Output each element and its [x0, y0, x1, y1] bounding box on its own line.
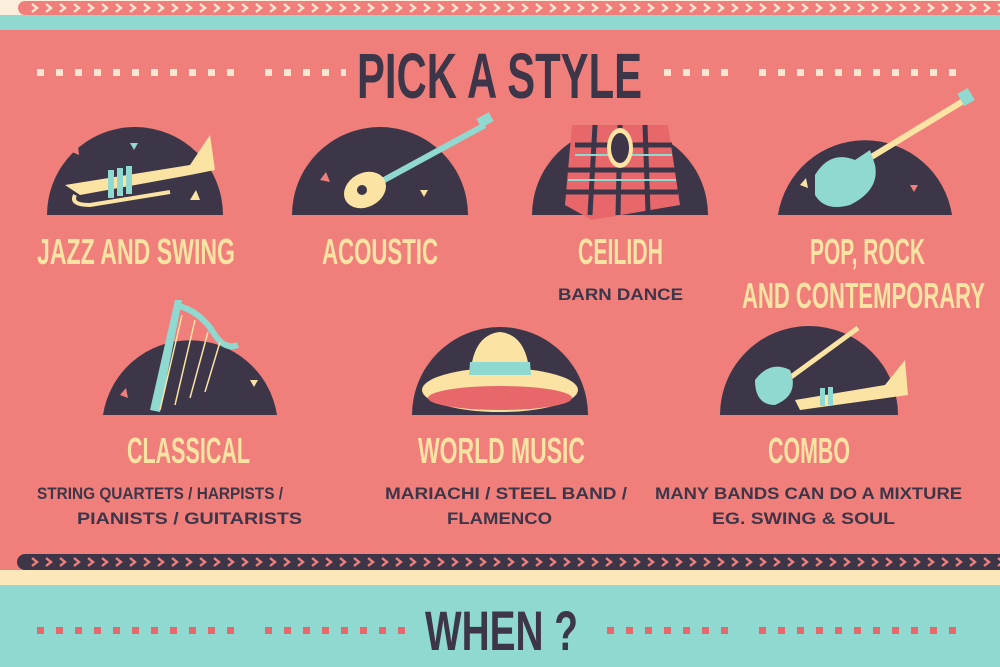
- panel: combo: COMBO: [768, 430, 850, 471]
- when dots left: [37, 627, 405, 635]
- panel: world music: WORLD MUSIC: [418, 430, 585, 471]
- panel: pop rock and contemporary: [742, 88, 985, 316]
- panel: world music: MARIACHI / STEEL BAND /: [385, 484, 627, 503]
- title dots right: [664, 69, 968, 77]
- panel: combo: [655, 326, 962, 528]
- panel: classical: [37, 300, 302, 528]
- title: PICK A STYLE: [357, 40, 642, 112]
- top braid border: [18, 0, 1000, 16]
- panel: ceilidh: CEILIDH: [578, 231, 663, 272]
- icon: kilt: [565, 125, 680, 220]
- icon: harp: [150, 300, 238, 412]
- panel: combo: MANY BANDS CAN DO A MIXTURE: [655, 484, 962, 503]
- panel: classical: CLASSICAL: [127, 430, 250, 471]
- icon: trumpet: [65, 135, 215, 205]
- icon: sombrero: [422, 332, 578, 412]
- panel: world music: FLAMENCO: [447, 509, 552, 528]
- title dots left: [37, 69, 346, 77]
- icon: acoustic guitar: [338, 112, 494, 215]
- panel: world music: [385, 327, 627, 528]
- panel: acoustic: [292, 112, 494, 272]
- panel: jazz and swing: [37, 127, 235, 272]
- icon: guitar and trumpet: [755, 328, 908, 410]
- panel: ceilidh: [532, 125, 708, 304]
- icon: electric guitar: [815, 88, 975, 207]
- heading: when: WHEN ?: [425, 599, 578, 662]
- panel: jazz and swing: JAZZ AND SWING: [37, 231, 235, 272]
- panel: classical: PIANISTS / GUITARISTS: [77, 509, 302, 528]
- panel: combo: EG. SWING & SOUL: [712, 509, 895, 528]
- panel: ceilidh: BARN DANCE: [558, 285, 683, 304]
- when dots right: [607, 627, 968, 635]
- panel: classical: STRING QUARTETS / HARPISTS /: [37, 484, 283, 503]
- panel: acoustic: ACOUSTIC: [322, 231, 438, 272]
- bottom braid border: [17, 554, 1000, 570]
